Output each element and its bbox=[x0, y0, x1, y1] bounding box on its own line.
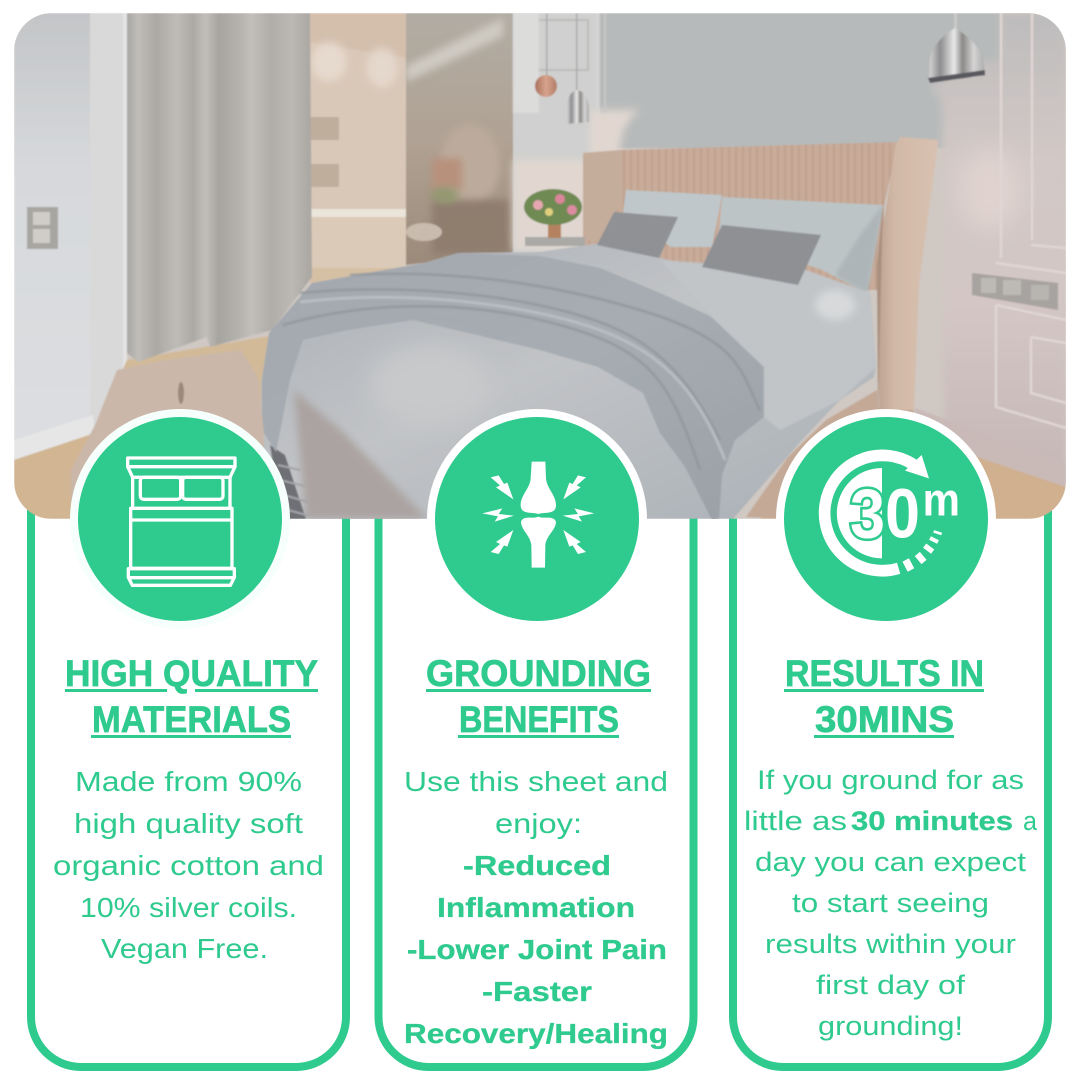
text: results description: results within your bbox=[765, 929, 1016, 959]
heading: grounding benefits bbox=[426, 653, 651, 740]
text: results description: day you can expect bbox=[755, 847, 1027, 877]
icon: 30 minute timer: 30 bbox=[850, 475, 920, 553]
icon: 30 minute timer: m bbox=[923, 473, 960, 525]
heading: results in 30 mins: 30MINS bbox=[815, 699, 954, 740]
text: results description: first day of bbox=[816, 970, 966, 1000]
text: results description: a bbox=[1023, 806, 1038, 836]
text: high quality materials description: Vegan Free. bbox=[101, 933, 268, 964]
heading: results in 30 mins bbox=[784, 653, 984, 740]
heading: grounding benefits: BENEFITS bbox=[459, 699, 619, 740]
circle: bed icon badge bbox=[70, 409, 290, 629]
circle: knee joint icon badge bbox=[427, 409, 647, 629]
photo: bedroom with grounding sheet bbox=[14, 13, 1066, 520]
text: grounding benefits list: enjoy: bbox=[495, 808, 582, 839]
icon: knee joint with pain bolts bbox=[482, 462, 594, 568]
circle: 30 minute timer icon badge bbox=[776, 409, 996, 629]
heading: grounding benefits: GROUNDING bbox=[426, 653, 651, 694]
panel: results in 30 mins card bbox=[733, 460, 1048, 1067]
heading: high quality materials: HIGH QUALITY bbox=[65, 653, 318, 694]
heading: results in 30 mins: RESULTS IN bbox=[785, 653, 984, 694]
text: results description: If you ground for as bbox=[757, 765, 1024, 795]
text: grounding benefits list bbox=[404, 766, 668, 1049]
text: high quality materials description: organic cotton and bbox=[53, 850, 324, 881]
icon: 30 minute timer bbox=[825, 455, 960, 571]
text: grounding benefits list: Use this sheet and bbox=[404, 766, 668, 797]
text: high quality materials description: high quality soft bbox=[74, 808, 303, 839]
text: grounding benefits list: -Lower Joint Pain bbox=[407, 934, 667, 965]
text: results description: to start seeing bbox=[792, 888, 989, 918]
text: grounding benefits list: -Reduced bbox=[463, 850, 611, 881]
text: results description bbox=[744, 765, 1038, 1041]
text: grounding benefits list: -Faster bbox=[482, 976, 592, 1007]
text: high quality materials description: Made from 90% bbox=[75, 766, 302, 797]
text: results description: little as bbox=[744, 806, 847, 836]
text: results description: 30 minutes bbox=[851, 806, 1013, 836]
icon: bed top view bbox=[128, 458, 235, 585]
heading: high quality materials: MATERIALS bbox=[92, 699, 291, 740]
panel: grounding benefits card bbox=[378, 460, 694, 1067]
panel: high quality materials card bbox=[31, 460, 346, 1067]
text: grounding benefits list: Recovery/Healing bbox=[404, 1018, 668, 1049]
text: high quality materials description: 10% silver coils. bbox=[80, 892, 297, 923]
text: grounding benefits list: Inflammation bbox=[437, 892, 635, 923]
text: high quality materials description bbox=[53, 766, 324, 964]
heading: high quality materials bbox=[65, 653, 318, 740]
text: results description: grounding! bbox=[818, 1011, 963, 1041]
